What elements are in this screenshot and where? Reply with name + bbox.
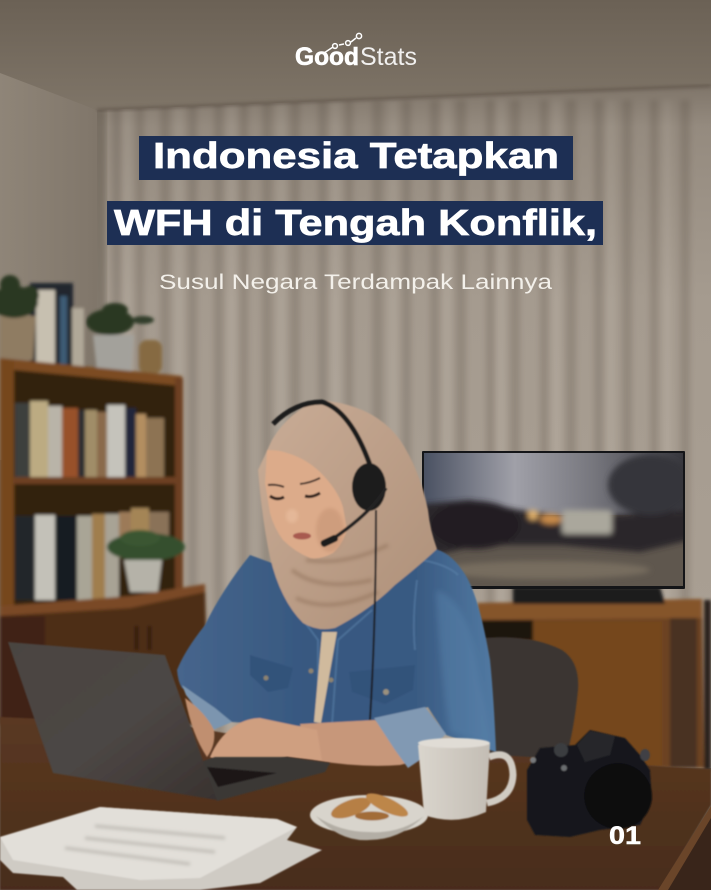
face (265, 450, 347, 558)
page number: 01 (609, 822, 641, 850)
logo: GoodStats: Stats (360, 43, 417, 71)
subtitle: Susul Negara Terdampak Lainnya (159, 271, 552, 294)
top shelf ornaments (0, 275, 162, 374)
mug (418, 738, 513, 820)
cabinet (0, 586, 207, 725)
inner top (314, 632, 337, 723)
logo: GoodStats: Good (295, 43, 359, 71)
title line 1: Indonesia Tetapkan (153, 135, 559, 176)
shelf plant (107, 530, 185, 592)
papers (0, 807, 322, 890)
laptop base (200, 757, 330, 801)
books row 1 (15, 401, 164, 477)
rolled cuff (374, 707, 446, 768)
chair (483, 637, 578, 758)
laptop lid (8, 642, 217, 800)
hijab drape folds (292, 545, 388, 605)
forearm (300, 720, 412, 766)
hands (185, 698, 214, 757)
shelf carcass (0, 358, 182, 620)
eyebrows and eyes (268, 478, 320, 499)
plate of cookies (310, 789, 428, 840)
laptop (8, 642, 330, 801)
hijab (258, 400, 437, 629)
shirt pockets (250, 655, 415, 704)
camera (527, 730, 652, 837)
logo: GoodStats (295, 33, 417, 71)
right sleeve highlight (436, 590, 490, 745)
left wall (0, 73, 97, 460)
books row 2 (15, 508, 169, 600)
bookshelf (0, 275, 207, 725)
table (0, 717, 711, 890)
headset (273, 402, 386, 720)
title line 2: WFH di Tengah Konflik, (114, 202, 597, 243)
logo chart line (324, 33, 362, 53)
TV console (477, 587, 711, 770)
shirt seams (292, 560, 458, 725)
ceiling (0, 0, 711, 110)
denim shirt (177, 548, 496, 752)
table corner and leg (664, 810, 711, 890)
curtain (92, 84, 711, 768)
title line 1 (139, 135, 573, 180)
person (177, 400, 496, 770)
TV showing conflict footage (415, 451, 692, 589)
